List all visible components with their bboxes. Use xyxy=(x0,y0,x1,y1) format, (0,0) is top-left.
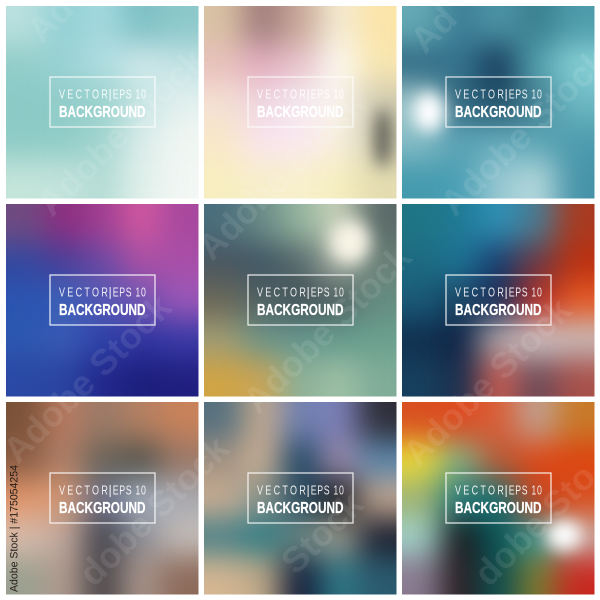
panel: pink and cream background xyxy=(204,6,396,198)
panel: sage and cream background xyxy=(204,204,396,396)
label: vector eps 10: | xyxy=(306,88,310,102)
label: background: BACKGROUND xyxy=(455,500,542,517)
label: vector eps 10: EPS 10 xyxy=(509,286,543,300)
blurred gradient xyxy=(204,6,396,198)
label: vector eps 10: EPS 10 xyxy=(311,286,345,300)
label: vector eps 10: EPS 10 xyxy=(113,88,147,102)
watermark: Adobe Stock diagonal text: Adobe Stock xyxy=(395,288,580,474)
blurred gradient xyxy=(204,204,396,396)
label: vector eps 10 xyxy=(455,88,543,102)
blurred gradient xyxy=(6,6,198,198)
blurred gradient xyxy=(402,402,594,594)
watermark: Adobe Stock diagonal text: dobe Sto xyxy=(466,456,600,594)
label: background: BACKGROUND xyxy=(455,302,542,319)
watermark: Adobe Stock diagonal text: dobe Stock xyxy=(71,427,238,594)
panel: red, yellow and teal background xyxy=(402,402,594,594)
label: vector eps 10: VECTOR xyxy=(59,286,110,300)
label: vector eps 10 xyxy=(59,286,147,300)
label: vector eps 10: EPS 10 xyxy=(509,484,543,498)
label: vector eps 10: | xyxy=(108,88,112,102)
label: vector eps 10: VECTOR xyxy=(455,286,506,300)
panel: dark teal background xyxy=(402,6,594,198)
label box xyxy=(50,77,155,127)
label: background: BACKGROUND xyxy=(455,104,542,121)
label: vector eps 10: VECTOR xyxy=(59,88,110,102)
watermark: Adobe Stock diagonal text: Adobe Stock xyxy=(189,82,374,268)
label: vector eps 10: EPS 10 xyxy=(113,484,147,498)
label box xyxy=(248,77,353,127)
label: vector eps 10: EPS 10 xyxy=(113,286,147,300)
label: background: BACKGROUND xyxy=(59,104,146,121)
label: vector eps 10: | xyxy=(108,286,112,300)
label: vector eps 10: | xyxy=(306,286,310,300)
watermark: Adobe Stock diagonal text: Adobe Stock xyxy=(29,38,214,224)
label: vector eps 10 xyxy=(257,286,345,300)
label: vector eps 10 xyxy=(257,484,345,498)
blurred gradient xyxy=(402,6,594,198)
label box xyxy=(50,473,155,523)
blurred gradient xyxy=(204,402,396,594)
blurred gradient xyxy=(402,204,594,396)
label: vector eps 10: VECTOR xyxy=(455,88,506,102)
white glow xyxy=(413,92,445,132)
label: vector eps 10: | xyxy=(504,484,508,498)
label box xyxy=(446,77,551,127)
label: vector eps 10: VECTOR xyxy=(257,286,308,300)
panel: brown and orange background xyxy=(6,402,198,594)
label: vector eps 10: VECTOR xyxy=(455,484,506,498)
label: background: BACKGROUND xyxy=(59,302,146,319)
panel: aqua background xyxy=(6,6,198,198)
blurred gradient xyxy=(6,402,198,594)
label: background: BACKGROUND xyxy=(257,500,344,517)
label: vector eps 10 xyxy=(59,88,147,102)
label: vector eps 10: | xyxy=(108,484,112,498)
label box xyxy=(50,275,155,325)
label: vector eps 10 xyxy=(59,484,147,498)
blurred gradient xyxy=(6,204,198,396)
watermark: Adobe Stock diagonal text: Adobe Stock xyxy=(235,235,420,421)
label: vector eps 10 xyxy=(257,88,345,102)
label: vector eps 10: VECTOR xyxy=(59,484,110,498)
dark stripe xyxy=(375,108,391,168)
panel: purple and blue background xyxy=(6,204,198,396)
label: vector eps 10: | xyxy=(504,286,508,300)
label: vector eps 10 xyxy=(455,484,543,498)
label: vector eps 10: | xyxy=(306,484,310,498)
label box xyxy=(248,275,353,325)
label: vector eps 10: EPS 10 xyxy=(311,484,345,498)
white glow xyxy=(330,220,370,264)
label: vector eps 10: EPS 10 xyxy=(509,88,543,102)
label: vector eps 10: | xyxy=(504,88,508,102)
label: vector eps 10 xyxy=(455,286,543,300)
label box xyxy=(446,275,551,325)
label: background: BACKGROUND xyxy=(257,302,344,319)
watermark: Adobe Stock diagonal text: Adobe Stock xyxy=(0,285,180,471)
label box xyxy=(248,473,353,523)
white glow xyxy=(546,520,582,550)
label box xyxy=(446,473,551,523)
label: vector eps 10: VECTOR xyxy=(257,484,308,498)
panel: teal and red background xyxy=(402,204,594,396)
label: background: BACKGROUND xyxy=(59,500,146,517)
label: vector eps 10: VECTOR xyxy=(257,88,308,102)
watermark: Adobe Stock diagonal text: Stock xyxy=(273,483,372,582)
panel: blue, tan and teal background xyxy=(204,402,396,594)
stock id caption: Adobe Stock | #175054254 xyxy=(8,465,20,592)
label: vector eps 10: EPS 10 xyxy=(311,88,345,102)
label: background: BACKGROUND xyxy=(257,104,344,121)
